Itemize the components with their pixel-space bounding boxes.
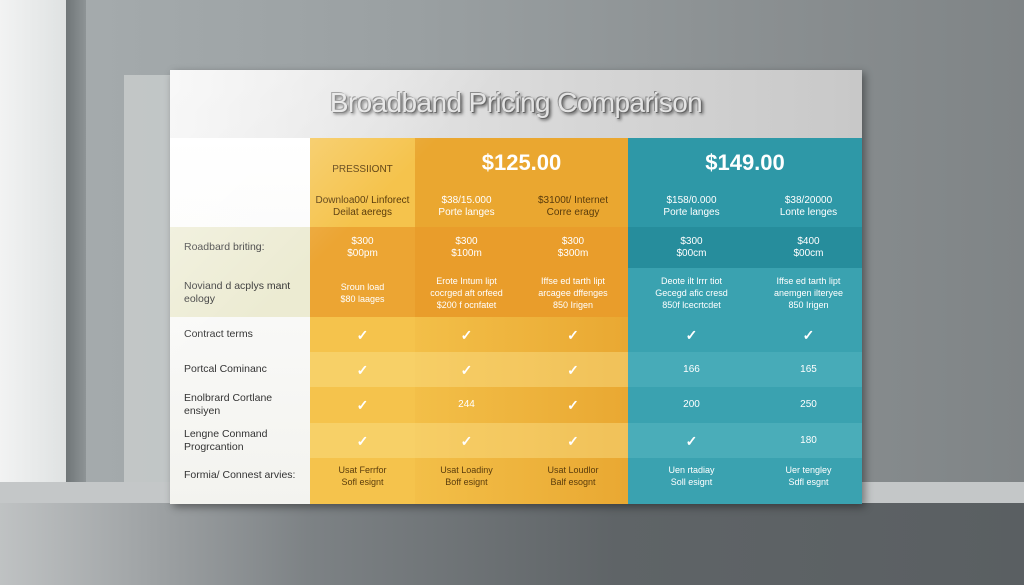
board panel: $400 xyxy=(797,236,820,246)
row: lengne xyxy=(184,428,267,452)
board panel: Lonte lenges xyxy=(780,207,837,218)
row: contract terms: Contract terms xyxy=(184,328,253,340)
row: description xyxy=(184,280,290,304)
board panel: Porte langes xyxy=(663,207,720,218)
board panel: $38/15.000 xyxy=(441,195,492,206)
row: description: eology xyxy=(184,292,215,304)
row: enolbrard: Enolbrard Cortlane xyxy=(184,392,272,404)
board panel: $300 xyxy=(351,236,374,246)
row: description: Noviand d acplys mant xyxy=(184,280,290,292)
board panel: Usat Loadiny xyxy=(440,464,493,474)
board panel: $00cm xyxy=(676,248,706,258)
board panel: 850f lcecrtcdet xyxy=(662,300,721,310)
board panel: $100m xyxy=(451,248,482,258)
board panel: Uen rtadiay xyxy=(668,464,715,474)
row: broadband pricing: Roadbard briting: xyxy=(184,241,265,253)
board panel: Sdfl esgnt xyxy=(788,476,829,486)
board panel: Soll esignt xyxy=(671,476,712,486)
board panel: $300 xyxy=(680,236,703,246)
window pillar left xyxy=(0,0,66,505)
board panel: $38/20000 xyxy=(785,195,832,206)
row: formia: Formia/ Connest arvies: xyxy=(184,469,295,481)
board panel: $300m xyxy=(558,248,588,258)
board panel: 850 Irigen xyxy=(553,300,593,310)
board panel: ✓ xyxy=(357,362,368,378)
board panel: Sofl esignt xyxy=(341,476,384,486)
board panel: arcagee dffenges xyxy=(538,288,608,298)
board panel: Balf esognt xyxy=(550,476,596,486)
board panel: ✓ xyxy=(686,326,697,342)
board panel: Porte langes xyxy=(438,207,495,218)
board panel: Gecegd afic cresd xyxy=(655,288,728,298)
board panel: 165 xyxy=(800,364,817,374)
board panel: Uer tengley xyxy=(785,464,832,474)
board panel: 166 xyxy=(683,364,700,374)
board panel: ✓ xyxy=(803,326,814,342)
title: Broadband Pricing Comparison xyxy=(330,87,702,118)
board panel: 200 xyxy=(683,399,700,410)
board panel: $158/0.000 xyxy=(666,195,717,206)
board panel: 180 xyxy=(800,434,817,446)
header row 2 xyxy=(316,195,410,218)
baseboard xyxy=(0,482,1024,504)
board panel: anemgen ilteryee xyxy=(774,288,843,298)
board panel: Boff esignt xyxy=(445,476,488,486)
light patch on wall xyxy=(124,75,170,495)
board panel: $300 xyxy=(562,236,584,246)
board panel: 250 xyxy=(800,399,817,410)
board panel: ✓ xyxy=(461,326,472,342)
board panel: Iffse ed tarth lipt xyxy=(541,276,605,286)
header row 2: Deilat aeregs xyxy=(333,207,392,218)
orange columns xyxy=(415,138,628,504)
board panel: ✓ xyxy=(357,432,368,448)
board panel: ✓ xyxy=(567,397,579,413)
board panel: Erote Intum lipt xyxy=(436,276,497,286)
label column xyxy=(170,138,310,504)
header row 1: PRESSIIONT xyxy=(332,164,393,175)
light glare xyxy=(170,70,862,504)
row: enolbrard: ensiyen xyxy=(184,405,220,417)
board panel: 244 xyxy=(458,399,475,410)
board panel: 850 Irigen xyxy=(788,300,828,310)
board panel: ✓ xyxy=(567,326,579,342)
board panel: $200 f ocnfatet xyxy=(437,300,496,310)
board panel: ✓ xyxy=(461,362,472,378)
board panel: Sroun load xyxy=(341,282,384,292)
board panel: Usat Ferrfor xyxy=(338,464,386,474)
yellow column xyxy=(310,138,415,504)
board panel: Deote ilt lrrr tiot xyxy=(661,276,722,286)
board panel: $149.00 xyxy=(705,150,785,175)
row: lengne: Progrcantion xyxy=(184,440,244,452)
board panel: Iffse ed tarth lipt xyxy=(777,276,840,286)
board panel: $3100t/ Internet xyxy=(538,195,608,206)
row: lengne: Lengne Conmand xyxy=(184,428,267,440)
board panel: $300 xyxy=(455,236,478,246)
board panel: $00cm xyxy=(793,248,824,258)
board panel: Usat Loudlor xyxy=(547,464,599,474)
board panel: ✓ xyxy=(357,326,368,342)
title band xyxy=(170,70,862,138)
board panel: ✓ xyxy=(567,362,579,378)
board panel: $00pm xyxy=(347,248,378,258)
board panel: cocrged aft orfeed xyxy=(430,288,503,298)
board panel: ✓ xyxy=(567,432,579,448)
board panel xyxy=(170,70,862,504)
teal columns xyxy=(628,138,862,504)
floor xyxy=(0,503,1024,585)
board panel: $80 laages xyxy=(340,294,385,304)
board panel: Corre eragy xyxy=(547,207,599,218)
row: portal: Portcal Cominanc xyxy=(184,363,267,375)
header row 2: Downloa00/ Linforect xyxy=(316,195,409,206)
board panel: ✓ xyxy=(686,432,697,448)
board panel: $125.00 xyxy=(482,150,561,175)
board panel: ✓ xyxy=(461,432,472,448)
row: enolbrard xyxy=(184,392,272,417)
board panel: ✓ xyxy=(357,397,368,413)
